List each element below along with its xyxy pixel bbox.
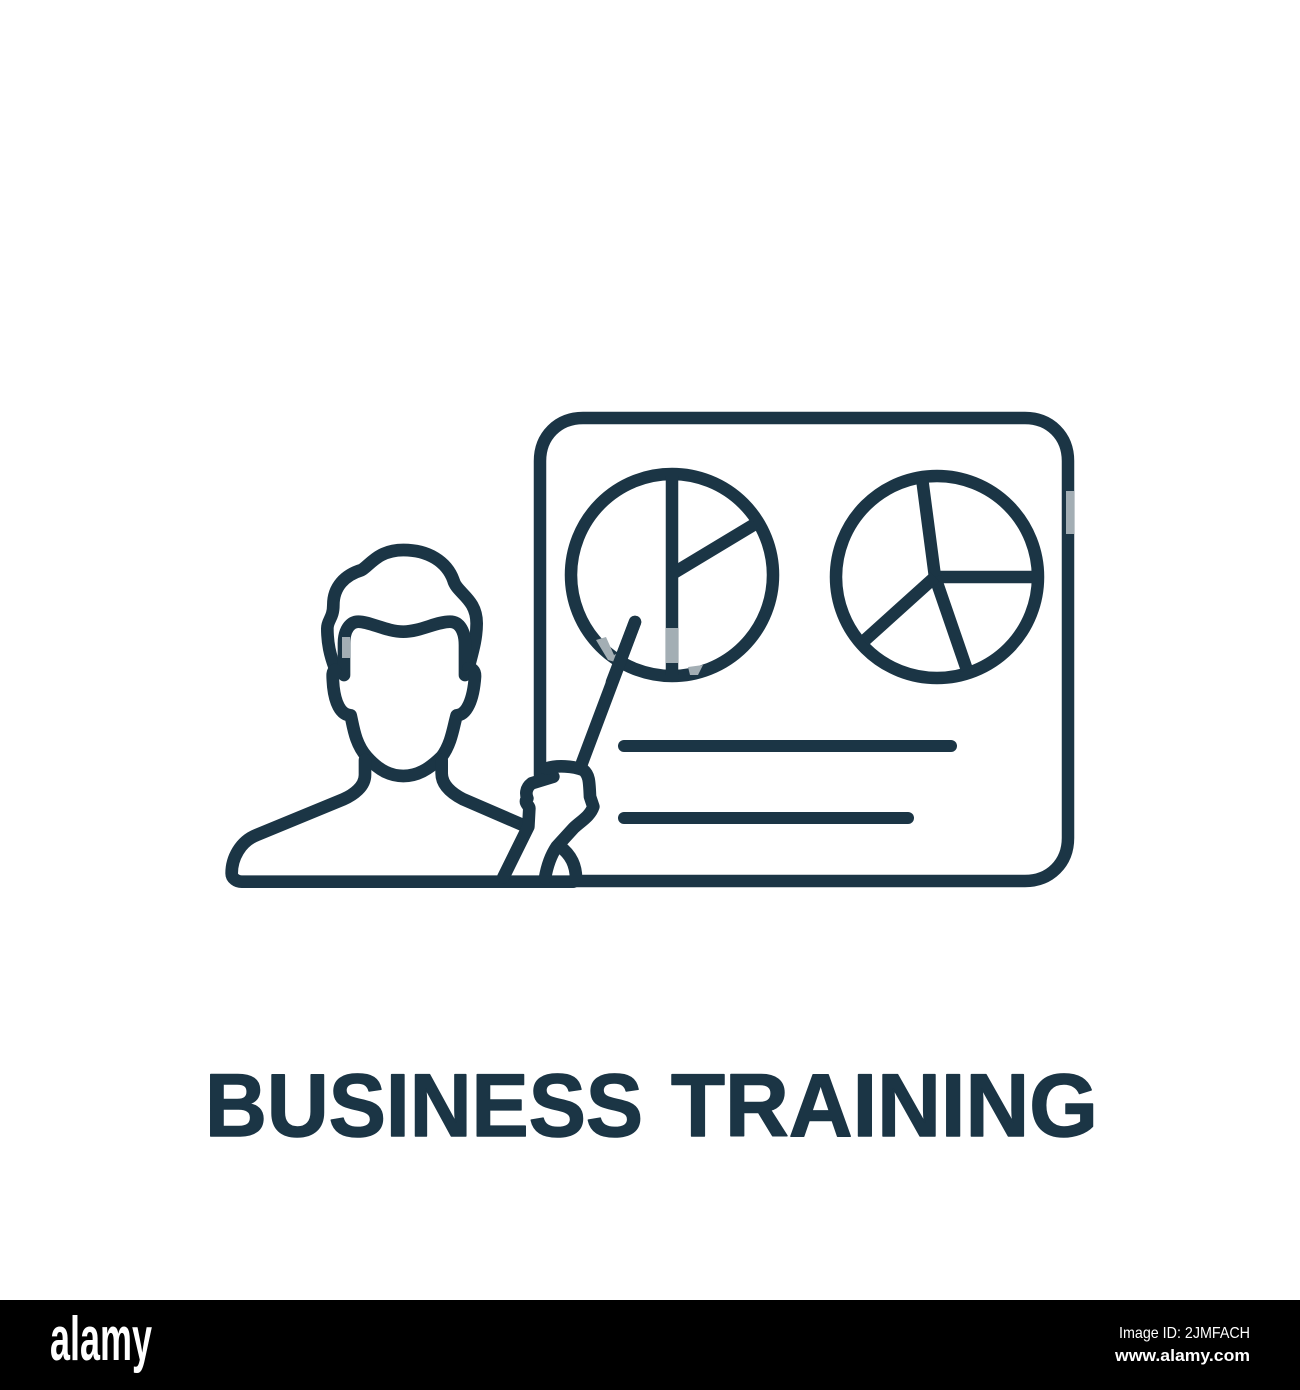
title: TRAINING: [671, 1055, 1098, 1155]
hairline: [344, 622, 465, 675]
presenter figure: [232, 550, 573, 882]
website: www.alamy.com: [1114, 1346, 1250, 1365]
face outline: [333, 668, 475, 776]
alamy logo: alamy: [50, 1305, 152, 1374]
pointer tip over watermark: [612, 622, 635, 682]
pie chart left: [571, 474, 773, 676]
hand holding pointer: [503, 766, 593, 878]
title: [205, 1055, 1098, 1155]
watermark traces: [342, 491, 1074, 675]
hair: [327, 550, 477, 668]
presentation board: [540, 418, 1068, 881]
footer bar: [0, 1300, 1300, 1390]
icon: business training presenter with board: [232, 418, 1068, 882]
text line two on board: [624, 812, 908, 824]
image id: Image ID: 2JMFACH: [1119, 1325, 1250, 1342]
pie chart right: [836, 476, 1038, 678]
shoulders and baseline: [232, 760, 573, 882]
title: BUSINESS: [205, 1055, 643, 1155]
text line one on board: [624, 740, 951, 752]
pointer stick: [582, 622, 635, 763]
